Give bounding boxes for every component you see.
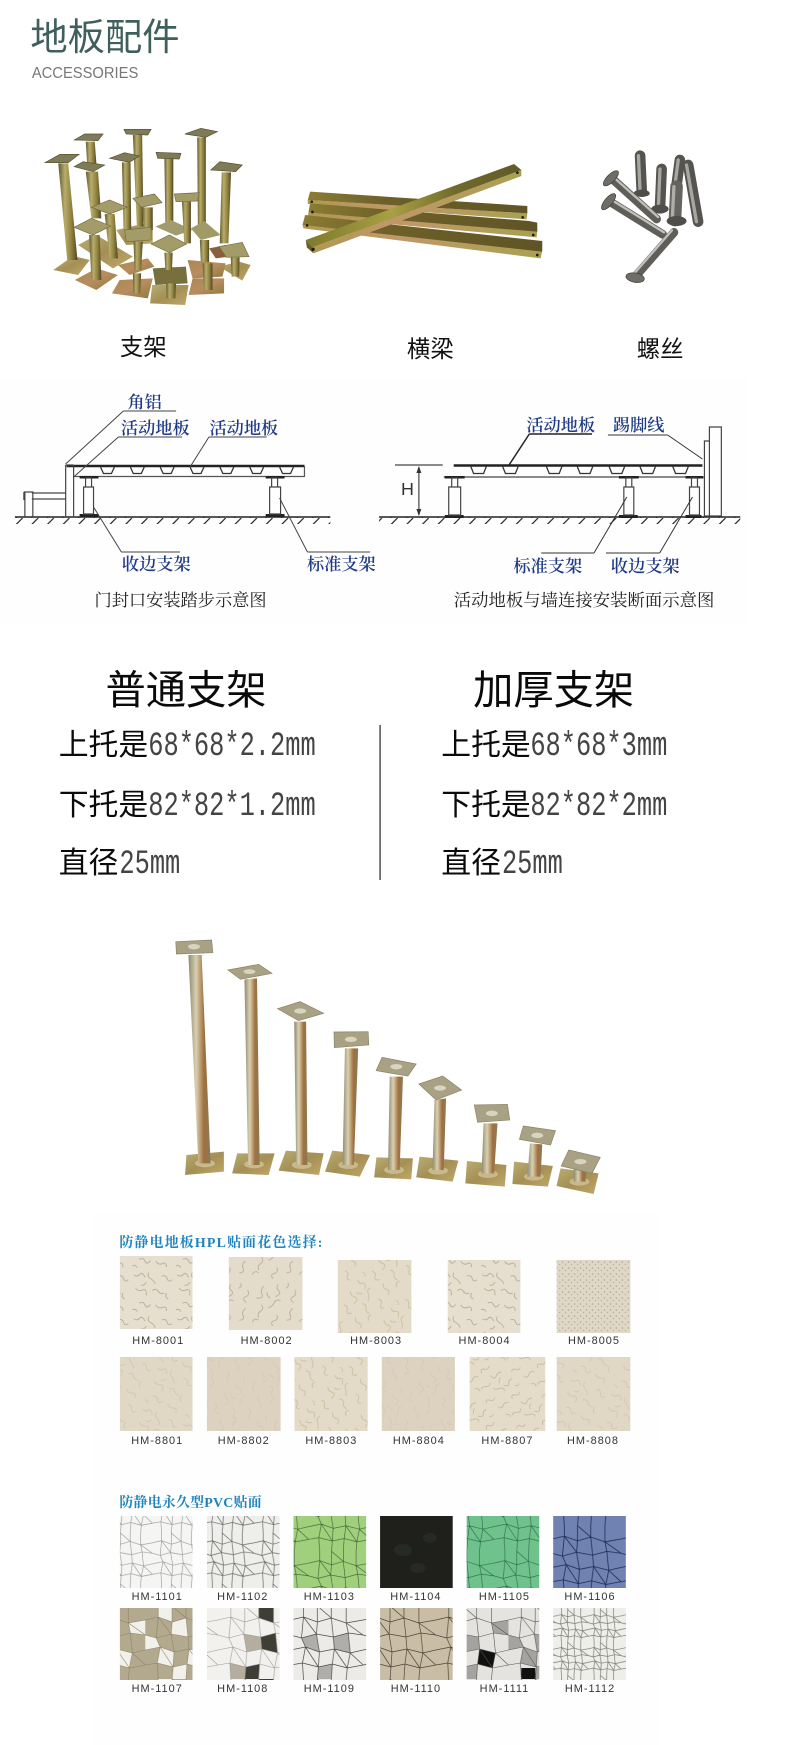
spec column: thickened pedestal: 加厚支架 [473,667,634,713]
photo: pile of pedestals [45,128,251,305]
spec column: thickened pedestal: 上托是 [441,729,531,762]
diagram: floor to wall connection section: 活动地板 [526,415,595,435]
swatch panel: PVC finishes: HM-1101 [132,1591,183,1603]
spec column: thickened pedestal: 下托是 [441,789,531,822]
divider between columns [379,725,381,880]
diagram: floor to wall connection section: 标准支架 [513,557,582,576]
spec column: standard pedestal: 上托是 [59,729,148,762]
swatch panel: HPL finishes: HM-8803 [305,1435,357,1447]
diagram: door sealing step installation: 活动地板 [121,418,190,438]
photo: steel cross beams [302,164,542,258]
swatch panel: HPL finishes: HM-8001 [132,1335,184,1347]
swatch panel: PVC finishes: 防静电永久型PVC贴面 [119,1494,262,1511]
title: chinese heading: 地板配件 [30,16,180,58]
swatch panel: PVC finishes: HM-1110 [391,1683,441,1695]
diagram: door sealing step installation: 角铝 [127,393,162,412]
spec column: thickened pedestal: 25mm [502,845,563,883]
swatch panel: PVC finishes: HM-1103 [304,1591,355,1603]
swatch panel: HPL finishes: 防静电地板HPL贴面花色选择: [119,1234,322,1251]
swatch panel: HPL finishes: HM-8005 [568,1335,620,1347]
diagram: door sealing step installation [15,393,376,610]
diagram: floor to wall connection section: 收边支架 [611,557,680,576]
swatch panel: PVC finishes: HM-1106 [564,1591,616,1603]
spec column: standard pedestal: 普通支架 [105,667,267,713]
swatch panel: HPL finishes: HM-8004 [459,1335,511,1347]
spec column: thickened pedestal: 82*82*2mm [530,787,667,825]
spec column: standard pedestal: 82*82*1.2mm [148,787,316,825]
spec column: thickened pedestal: 直径 [441,847,501,880]
swatch panel: HPL finishes: HM-8002 [241,1335,293,1347]
label: screw: 螺丝 [637,336,684,362]
spec column: standard pedestal: 下托是 [59,789,148,822]
swatch panel: PVC finishes: HM-1107 [132,1683,183,1695]
label: cross beam: 横梁 [407,336,454,362]
spec column: standard pedestal: 68*68*2.2mm [148,727,316,765]
spec column: thickened pedestal [441,667,667,883]
diagram: door sealing step installation: 标准支架 [307,555,376,574]
swatch panel: PVC finishes: HM-1111 [480,1683,529,1695]
swatch panel: PVC finishes [119,1494,626,1695]
diagram: door sealing step installation: 门封口安装踏步示意图 [95,591,267,610]
diagram: floor to wall connection section: 踢脚线 [613,415,665,435]
swatch panel: HPL finishes: HM-8804 [393,1435,445,1447]
swatch panel: HPL finishes: HM-8807 [481,1435,533,1447]
photo: steel screws [599,156,698,284]
diagram: floor to wall connection section: H [401,479,414,499]
spec column: standard pedestal: 直径 [59,847,118,880]
swatch panel: PVC finishes: HM-1104 [390,1591,441,1603]
swatch panel: PVC finishes: HM-1108 [217,1683,268,1695]
spec column: standard pedestal: 25mm [119,845,180,883]
swatch panel: PVC finishes: HM-1109 [304,1683,355,1695]
swatch panel: PVC finishes: HM-1105 [479,1591,530,1603]
spec column: thickened pedestal: 68*68*3mm [530,727,667,765]
spec column: standard pedestal [59,667,316,883]
swatch panel: HPL finishes: HM-8801 [131,1435,183,1447]
diagram: door sealing step installation: 收边支架 [122,555,191,574]
photo: nine pedestals by height [176,940,600,1194]
diagram: floor to wall connection section [379,415,740,610]
diagram: floor to wall connection section: 活动地板与墙连接安装断面示意图 [454,591,714,610]
swatch panel: HPL finishes: HM-8808 [567,1435,619,1447]
label: pedestal: 支架 [120,334,167,360]
swatch panel: HPL finishes [119,1234,630,1447]
subtitle: accessories: ACCESSORIES [32,65,138,82]
swatch panel: HPL finishes: HM-8003 [350,1335,402,1347]
swatch panel: PVC finishes: HM-1112 [565,1683,615,1695]
swatch panel: PVC finishes: HM-1102 [217,1591,268,1603]
swatch panel: HPL finishes: HM-8802 [218,1435,270,1447]
diagram: door sealing step installation: 活动地板 [209,418,278,438]
